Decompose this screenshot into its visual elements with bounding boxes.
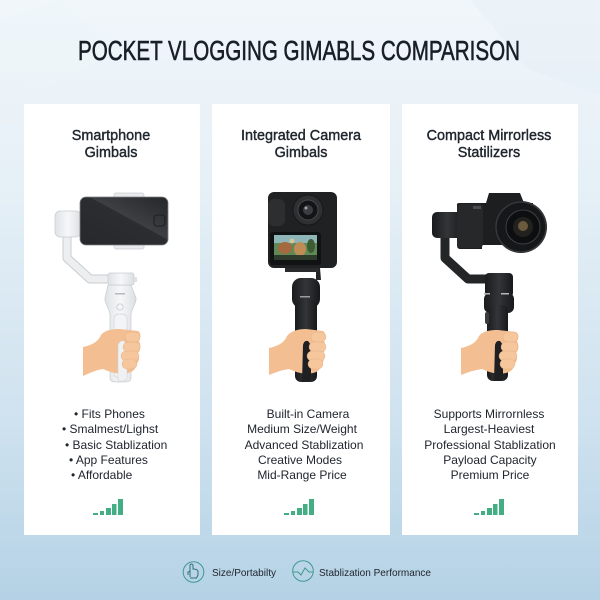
feature list: compact mirrorless stabilizers: Largest-Heaviest [444, 422, 535, 436]
signal bars: compact mirrorless stabilizers [474, 499, 504, 515]
feature list: integrated camera gimbals: Creative Modes [258, 453, 342, 467]
heading: integrated camera gimbals: Integrated Camera [241, 128, 361, 144]
feature list: integrated camera gimbals: Medium Size/Weight [247, 422, 358, 436]
feature list: compact mirrorless stabilizers: Payload Capacity [443, 453, 537, 467]
heading: compact mirrorless stabilizers: Compact Mirrorless [427, 128, 551, 144]
feature list: integrated camera gimbals: Built-in Camera [267, 407, 350, 421]
signal bars: integrated camera gimbals [284, 499, 314, 515]
illustration: white smartphone gimbal with hand [55, 193, 168, 382]
signal bars: smartphone gimbals [93, 499, 123, 515]
panel: integrated camera gimbals [212, 104, 390, 535]
feature list: smartphone gimbals: • Basic Stablization [65, 438, 167, 452]
heading: integrated camera gimbals: Gimbals [275, 145, 327, 161]
feature list: compact mirrorless stabilizers: Supports Mirrornless [434, 407, 544, 421]
heading: smartphone gimbals: Smartphone [72, 128, 150, 144]
feature list: integrated camera gimbals: Mid-Range Price [257, 468, 347, 482]
heading: smartphone gimbals: Gimbals [85, 145, 137, 161]
feature list: smartphone gimbals: • Affordable [71, 468, 133, 482]
legend label: stabilization performance: Stablization Performance [319, 567, 431, 579]
illustration: black camera gimbal with hand [268, 192, 337, 382]
legend [183, 561, 431, 582]
icon: stabilization wave [293, 561, 313, 581]
feature list: compact mirrorless stabilizers: Professional Stablization [424, 438, 556, 452]
feature list: smartphone gimbals: • Smalmest/Lighst [62, 422, 159, 436]
heading: compact mirrorless stabilizers: Statilizers [458, 145, 520, 161]
icon: hand size/portability [183, 562, 204, 582]
illustration: mirrorless camera gimbal with hand [432, 193, 547, 381]
feature list: smartphone gimbals: • App Features [69, 453, 148, 467]
panel: smartphone gimbals [24, 104, 200, 535]
feature list: compact mirrorless stabilizers: Premium Price [451, 468, 530, 482]
panel: compact mirrorless stabilizers [402, 104, 578, 535]
feature list: integrated camera gimbals: Advanced Stablization [245, 438, 363, 452]
legend label: size/portability: Size/Portabilty [212, 567, 277, 579]
feature list: smartphone gimbals: • Fits Phones [74, 407, 145, 421]
